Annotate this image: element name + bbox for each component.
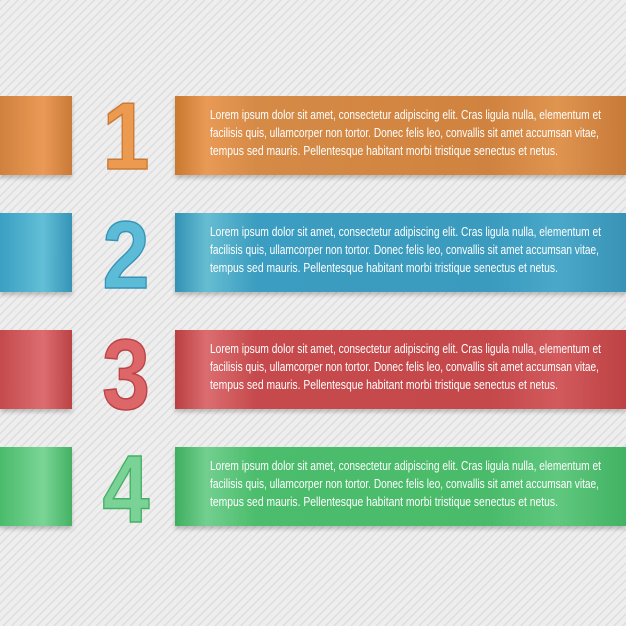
- row 3: [0, 319, 626, 430]
- text 2: [210, 225, 601, 275]
- number 4: 4: [103, 436, 149, 543]
- band 1: [175, 96, 626, 175]
- band 4: [175, 447, 626, 526]
- row 1: [0, 83, 626, 190]
- number 1: 1: [103, 83, 149, 190]
- left tab 1: [0, 96, 72, 175]
- number 3: 3: [102, 319, 150, 430]
- left tab 4: [0, 447, 72, 526]
- text 1: tempus sed mauris. Pellentesque habitant morbi tristique senectus et netus.: [210, 144, 558, 158]
- text 3: tempus sed mauris. Pellentesque habitant morbi tristique senectus et netus.: [210, 378, 558, 392]
- band 3: [175, 330, 626, 409]
- band 2: [175, 213, 626, 292]
- left tab 3: [0, 330, 72, 409]
- number 2: 2: [103, 202, 149, 309]
- text 2: tempus sed mauris. Pellentesque habitant morbi tristique senectus et netus.: [210, 261, 558, 275]
- row 4: [0, 436, 626, 543]
- text 1: [210, 108, 601, 158]
- row 2: [0, 202, 626, 309]
- text 4: [210, 459, 601, 509]
- left tab 2: [0, 213, 72, 292]
- text 3: [210, 342, 601, 392]
- text 4: tempus sed mauris. Pellentesque habitant morbi tristique senectus et netus.: [210, 495, 558, 509]
